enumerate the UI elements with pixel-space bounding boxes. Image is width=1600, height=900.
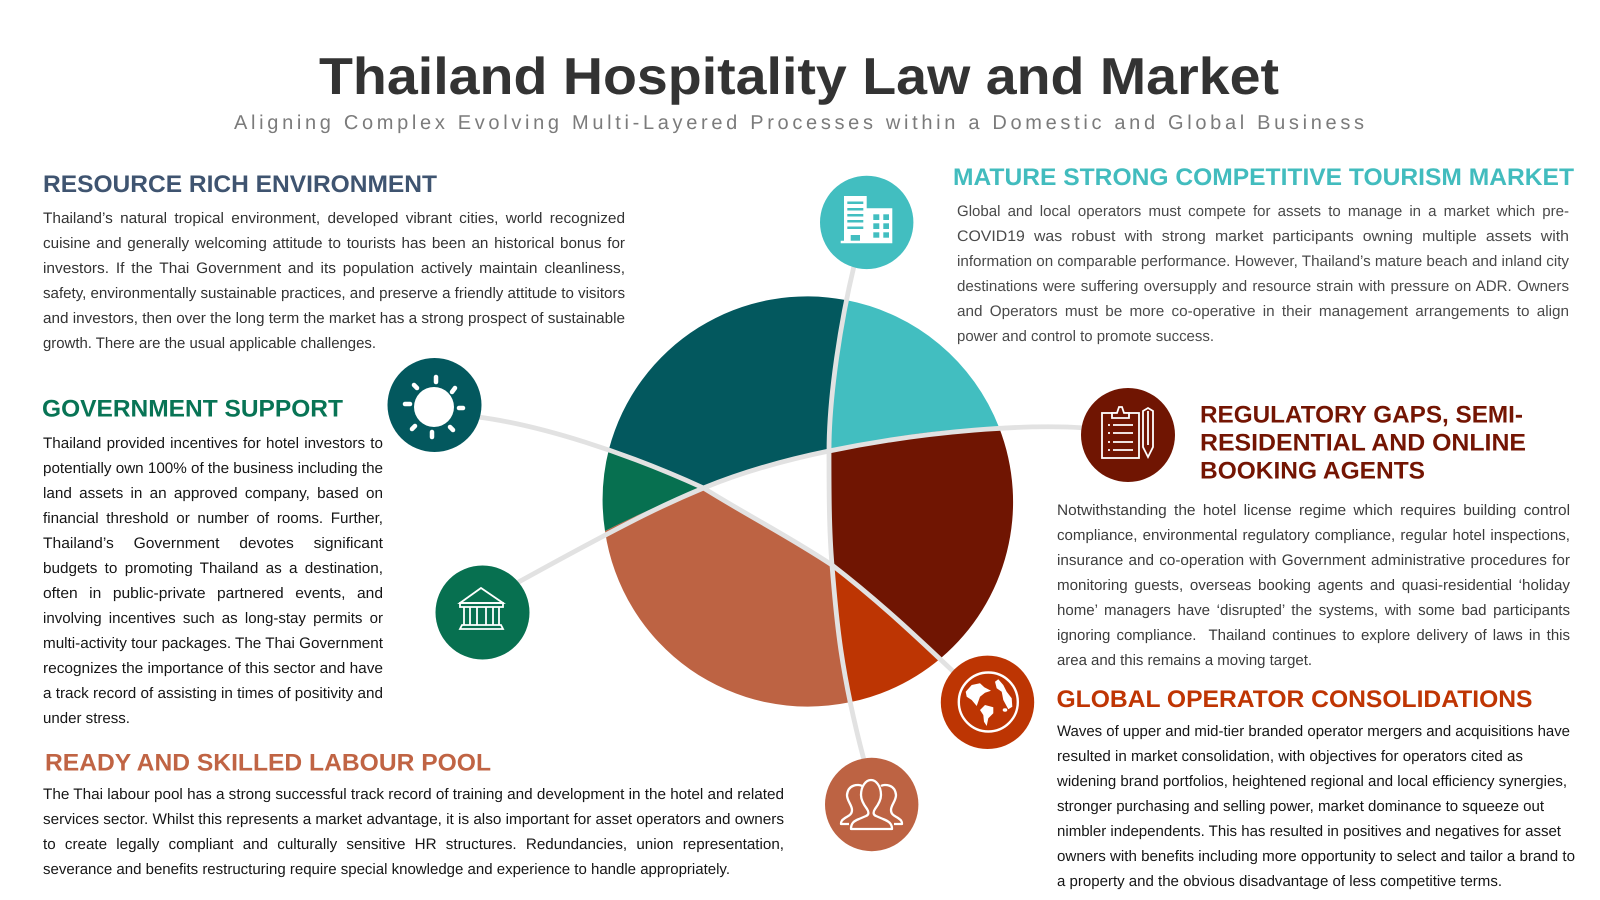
text block: government support xyxy=(43,435,384,727)
text block: ready and skilled labour pool xyxy=(43,786,784,878)
text block: government support: under stress. xyxy=(43,710,130,727)
text block: ready and skilled labour pool: services sector. Whilst this represents a market advantage, it is also important for asset operators and owners xyxy=(43,811,784,828)
text block: global operator consolidations: widening brand portfolios, heightened regional and local efficiency synergies, xyxy=(1056,773,1567,790)
subtitle: Aligning Complex Evolving Multi-Layered Processes within a Domestic and Global Business xyxy=(234,112,1364,134)
segment: maroon xyxy=(828,427,1013,658)
segment: aqua xyxy=(829,300,999,451)
text block: ready and skilled labour pool: The Thai labour pool has a strong successful track record of training and development in the hotel and related xyxy=(43,786,784,803)
icon: sun xyxy=(388,358,482,452)
text block: global operator consolidations: owners with benefits including more opportunity to select and tailor a brand to xyxy=(1057,848,1575,865)
icon: globe xyxy=(941,656,1034,749)
text block: regulatory gaps: compliance, environmental regulatory compliance, regular hotel inspections, xyxy=(1057,527,1570,544)
connector: clipboard to bank xyxy=(515,427,1085,584)
heading: regulatory gaps: REGULATORY GAPS, SEMI- xyxy=(1200,402,1523,428)
text block: regulatory gaps: monitoring guests, overseas booking agents and quasi-residential ‘holiday xyxy=(1057,577,1570,594)
text block: government support: often in public-private partnered events, and xyxy=(43,585,383,602)
text block: mature strong competitive tourism market: information on comparable performance. However, Thailand’s mature beach and inland city xyxy=(957,253,1569,270)
segment: orange red xyxy=(832,565,941,702)
chart: central segmented circle xyxy=(478,266,1085,760)
connector: sun to globe xyxy=(478,417,958,676)
heading: regulatory gaps xyxy=(1200,402,1526,484)
text block: regulatory gaps: insurance and co-operation with Government administrative procedures for xyxy=(1057,552,1570,569)
text block: global operator consolidations xyxy=(1056,723,1575,890)
heading: resource rich environment: RESOURCE RICH ENVIRONMENT xyxy=(43,171,437,198)
heading: mature strong competitive tourism market: MATURE STRONG COMPETITIVE TOURISM MARKET xyxy=(953,164,1574,191)
text block: government support: Thailand’s Government devotes significant xyxy=(43,535,384,552)
connector: building to people xyxy=(829,266,864,760)
text block: resource rich environment: Thailand’s natural tropical environment, developed vibrant cities, world recognized xyxy=(43,210,625,227)
text block: resource rich environment: investors. If the Thai Government and its population actively maintain cleanliness, xyxy=(43,260,625,277)
text block: ready and skilled labour pool: to create legally compliant and culturally sensitive HR structures. Redundancies, union representation, xyxy=(43,836,784,853)
text block: government support: potentially own 100% of the business including the xyxy=(43,460,383,477)
panel: ready and skilled labour pool xyxy=(43,750,784,878)
text block: government support: budgets to promoting Thailand as a destination, xyxy=(43,560,383,577)
text block: regulatory gaps: home’ managers have ‘disrupted’ the systems, with some bad participants xyxy=(1057,602,1570,619)
heading: ready and skilled labour pool: READY AND SKILLED LABOUR POOL xyxy=(45,750,491,776)
heading: regulatory gaps: BOOKING AGENTS xyxy=(1200,458,1425,484)
text block: government support: a track record of assisting in times of positivity and xyxy=(43,685,383,702)
title: Thailand Hospitality Law and Market xyxy=(319,48,1279,106)
heading: global operator consolidations: GLOBAL OPERATOR CONSOLIDATIONS xyxy=(1056,686,1532,713)
panel: global operator consolidations xyxy=(1056,686,1575,890)
icon: people xyxy=(825,758,918,851)
text block: global operator consolidations: resulted in market consolidation, with objectives for operators cited as xyxy=(1057,748,1523,765)
text block: government support: Thailand provided incentives for hotel investors to xyxy=(43,435,383,452)
text block: regulatory gaps: area and this remains a moving target. xyxy=(1057,652,1312,669)
panel: resource rich environment xyxy=(43,171,625,352)
text block: global operator consolidations: Waves of upper and mid-tier branded operator mergers and acquisitions have xyxy=(1057,723,1570,740)
text block: global operator consolidations: a property and the obvious disadvantage of less competitive terms. xyxy=(1057,873,1502,890)
text block: global operator consolidations: nimbler independents. This has resulted in positives and negatives for asset xyxy=(1057,823,1562,840)
text block: regulatory gaps: Notwithstanding the hotel license regime which requires building control xyxy=(1057,502,1570,519)
text block: government support: financial threshold or number of rooms. Further, xyxy=(43,510,383,527)
panel: government support xyxy=(42,396,384,727)
text block: mature strong competitive tourism market: and Operators must be more co-operative in their management arrangements to align xyxy=(957,303,1569,320)
text block: mature strong competitive tourism market: power and control to promote success. xyxy=(957,328,1214,345)
text block: government support: multi-activity tour packages. The Thai Government xyxy=(43,635,384,652)
segment: dark teal xyxy=(609,296,847,488)
icon: clipboard and pen xyxy=(1081,388,1175,482)
segment: green xyxy=(603,449,704,531)
panel: mature strong competitive tourism market xyxy=(953,164,1574,345)
text block: resource rich environment xyxy=(43,210,625,352)
text block: resource rich environment: and investors, then over the long term the market has a strong prospect of sustainable xyxy=(43,310,625,327)
text block: government support: land assets in an approved company, based on xyxy=(43,485,383,502)
icon: building xyxy=(820,176,913,269)
panel: regulatory gaps xyxy=(1057,402,1570,669)
text block: ready and skilled labour pool: severance and benefits restructuring require special knowledge and experience to handle appropriately. xyxy=(43,861,730,878)
text block: mature strong competitive tourism market xyxy=(957,203,1569,345)
text block: government support: involving incentives such as long-stay permits or xyxy=(43,610,383,627)
heading: regulatory gaps: RESIDENTIAL AND ONLINE xyxy=(1200,430,1526,456)
text block: government support: recognizes the importance of this sector and have xyxy=(43,660,383,677)
heading: government support: GOVERNMENT SUPPORT xyxy=(42,396,343,422)
text block: global operator consolidations: stronger purchasing and selling power, market dominance to squeeze out xyxy=(1057,798,1545,815)
text block: mature strong competitive tourism market: destinations were suffering oversupply and resource strain with pressure on ADR. Owners xyxy=(957,278,1569,295)
icon: bank xyxy=(436,566,530,660)
text block: regulatory gaps xyxy=(1057,502,1570,669)
text block: resource rich environment: cuisine and generally welcoming attitude to tourists has been an historical bonus for xyxy=(43,235,625,252)
text block: mature strong competitive tourism market: COVID19 was robust with strong market participants owning multiple assets with xyxy=(957,228,1569,245)
text block: resource rich environment: growth. There are the usual applicable challenges. xyxy=(43,335,376,352)
text block: regulatory gaps: ignoring compliance. Thailand continues to explore delivery of laws in this xyxy=(1057,627,1570,644)
text block: resource rich environment: safety, environmentally sustainable practices, and preserve a friendly attitude to visitors xyxy=(43,285,625,302)
segment: terracotta xyxy=(605,488,849,707)
text block: mature strong competitive tourism market: Global and local operators must compete for assets to manage in a market which pre- xyxy=(957,203,1569,220)
